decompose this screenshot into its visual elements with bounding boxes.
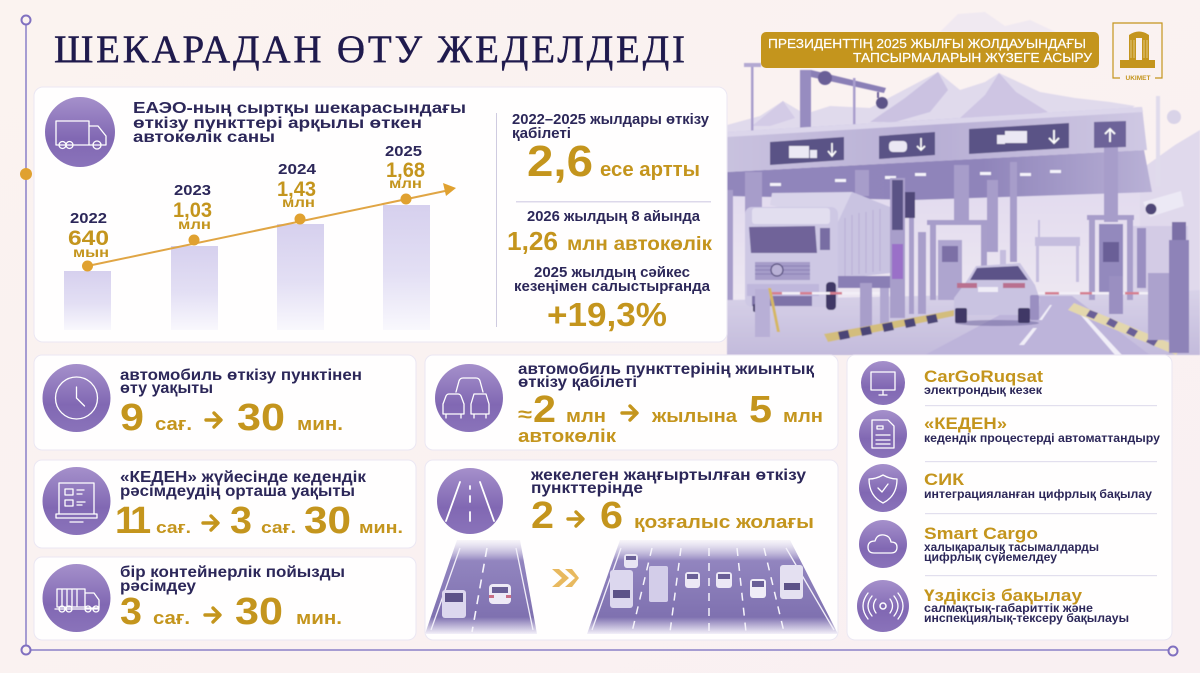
stat: capacity growth: есе артты [600,159,700,181]
title: ШЕКАРАДАН ӨТУ ЖЕДЕЛДЕДІ [54,28,685,71]
icon: monitor [861,361,905,405]
roadside camera and equipment [1143,191,1189,353]
panel: modernised checkpoint lanes: 6 [600,495,623,537]
floodlight pole [744,63,761,132]
item: CarGoRuqsat: CarGoRuqsat [924,367,1043,386]
icon: container truck [42,564,110,632]
panel: checkpoint crossing time: 9 [120,397,144,439]
banner: presidential address: ПРЕЗИДЕНТТІҢ 2025 ЖЫЛҒЫ ЖОЛДАУЫНДАҒЫ [768,36,1086,51]
ground [727,290,1200,355]
panel: checkpoint crossing time: мин. [297,414,343,434]
stat: capacity growth [512,112,709,186]
vehicles [610,554,803,608]
panel: container train clearance: 30 [235,591,283,633]
panel: checkpoint crossing time [34,355,416,450]
bar chart: 2025 [385,143,422,160]
panel: KEDEN customs time: «КЕДЕН» жүйесінде кедендік [120,469,367,486]
stat: capacity growth: 2,6 [527,137,593,186]
panel: total capacity of road checkpoints: өткізу қабілеті [518,374,637,391]
distant gantry and lamp posts [1000,220,1188,296]
illustration: two-lane road [425,540,537,634]
stat: year-on-year change: кезеңімен салыстырғанда [514,279,711,295]
stat: 2026 vehicles: 2026 жылдың 8 айында [527,209,701,225]
panel: KEDEN customs time [34,460,416,548]
icon: cars in traffic [435,364,503,432]
stat: 2026 vehicles: 1,26 [507,226,558,256]
panel: modernised checkpoint lanes [425,460,838,640]
direction signs [770,121,1126,165]
illustration: six-lane road [587,540,838,634]
panel: total capacity of road checkpoints: 5 [749,389,772,431]
panel: total capacity of road checkpoints: автокөлік [518,426,617,446]
truck [745,192,890,312]
panel: container train clearance: сағ. [153,608,190,628]
illustration: border checkpoint with trucks and cars [727,12,1200,355]
bar chart: мын [73,244,109,260]
panel: digital services [847,355,1172,640]
item: CarGoRuqsat [861,361,1043,405]
mountains [727,12,1200,290]
item: continuous monitoring [857,580,1129,632]
logo: UKIMET: UKIMET [1126,75,1150,82]
road lane [925,296,1150,355]
stat: year-on-year change [514,265,711,333]
booths [927,215,1146,300]
item: continuous monitoring: салмақтық-габариттік және [924,603,1093,615]
heading: өткізу пункттері арқылы өткен [133,115,422,132]
stat: year-on-year change: 2025 жылдың сәйкес [534,265,690,281]
panel: total capacity of road checkpoints: 2 [533,389,556,431]
item: SIK [859,464,1153,512]
sign: up arrow [1094,121,1126,148]
bar chart: 2024 [278,161,317,178]
panel: modernised checkpoint lanes: жекелеген жаңғыртылған өткізу [530,467,806,484]
logo: UKIMET [1113,23,1162,82]
icon: signal [857,580,909,632]
signal posts [890,178,926,318]
bar chart: млн [282,194,315,210]
icon: cloud [859,520,907,568]
panel: container train clearance: мин. [296,608,342,628]
panel: KEDEN customs time: мин. [359,518,403,537]
bar chart: 640 [68,227,109,250]
panel: KEDEN customs time: рәсімдеудің орташа уақыты [120,483,355,500]
panel: modernised checkpoint lanes: 2 [531,495,554,537]
barriers [755,276,1150,337]
item: Smart Cargo [859,520,1099,568]
stat: capacity growth: қабілеті [512,126,571,142]
panel: total capacity of road checkpoints [425,355,838,450]
bar chart: 1,68 [386,159,425,182]
item: CarGoRuqsat: электрондық кезек [924,385,1042,397]
van [442,590,466,618]
banner: presidential address: ТАПСЫРМАЛАРЫН ЖҮЗЕГЕ АСЫРУ [853,50,1093,65]
item: SIK: СИК [924,470,965,489]
item: continuous monitoring: Үздіксіз бақылау [924,586,1083,605]
bar chart: 2022 [70,210,107,227]
stat: 2026 vehicles: млн автокөлік [567,233,712,255]
panel: container train clearance: рәсімдеу [120,578,196,595]
striped curbs [824,303,1182,355]
stat: 2026 vehicles [507,209,712,256]
panel: container train clearance: 3 [120,591,142,633]
heading [133,100,466,146]
bar chart: 1,03 [173,199,212,222]
panel: checkpoint crossing time: 30 [237,397,285,439]
panel: container train clearance: бір контейнерлік пойызды [120,564,345,581]
item: SIK: интеграцияланған цифрлық бақылау [924,489,1153,501]
panel: checkpoint crossing time: өту уақыты [120,380,213,397]
canopy roof [727,107,1152,200]
heading: автокөлік саны [133,129,275,146]
heading: ЕАЭО-ның сыртқы шекарасындағы [133,100,466,117]
far lamp post [1156,96,1181,186]
icon: truck [45,97,115,167]
stat: capacity growth: 2022–2025 жылдары өткізу [512,112,709,128]
icon: chevrons [552,569,579,587]
canopy columns [727,147,1118,300]
icon: road [437,468,503,534]
sign: lorry lane [969,123,1069,154]
bar chart: млн [389,175,422,191]
light zone behind the canopy [727,170,1200,300]
sign: car lane [879,132,935,159]
divider [496,113,497,327]
overhead camera gantry [800,70,888,130]
banner: presidential address [761,32,1099,68]
panel: vehicles through EAEU external border [34,87,727,342]
item: KEDEN: «КЕДЕН» [924,414,1007,433]
panel: KEDEN customs time: сағ. [156,518,191,537]
stat: year-on-year change: +19,3% [547,296,667,333]
panel: KEDEN customs time: сағ. [261,518,296,537]
item: KEDEN: кедендік процестерді автоматтандыру [924,433,1161,445]
item: KEDEN [859,410,1161,458]
car rear view [954,263,1040,326]
bar chart: 1,43 [277,178,316,201]
icon: clock [42,364,110,432]
icon: laptop checklist [42,467,110,535]
panel: modernised checkpoint lanes: қозғалыс жолағы [634,512,814,532]
panel: KEDEN customs time: 3 [230,500,252,542]
item: Smart Cargo: Smart Cargo [924,524,1038,543]
panel: modernised checkpoint lanes: пункттерінде [531,480,643,497]
panel: total capacity of road checkpoints: ≈ [518,404,532,426]
item: continuous monitoring: инспекциялық-тексеру бақылауы [924,613,1129,625]
bar chart [64,143,456,330]
item: Smart Cargo: халықаралық тасымалдарды [924,542,1099,554]
panel: checkpoint crossing time: сағ. [155,414,192,434]
bar chart: 2023 [174,182,211,199]
panel: total capacity of road checkpoints: млн [783,406,823,426]
panel: total capacity of road checkpoints: жылына [651,406,738,426]
car [489,584,511,604]
panel: KEDEN customs time: 30 [304,500,351,542]
panel: total capacity of road checkpoints: автомобиль пункттерінің жиынтық [518,361,815,378]
panel: total capacity of road checkpoints: млн [566,406,606,426]
panel: container train clearance [34,557,416,640]
sign: truck lane [770,137,844,165]
icon: shield [859,464,907,512]
item: Smart Cargo: цифрлық сүйемелдеу [924,552,1058,564]
bar chart: млн [178,216,211,232]
panel: checkpoint crossing time: автомобиль өткізу пунктінен [120,367,362,384]
panel: KEDEN customs time: 11 [115,500,151,542]
icon: document [859,410,907,458]
